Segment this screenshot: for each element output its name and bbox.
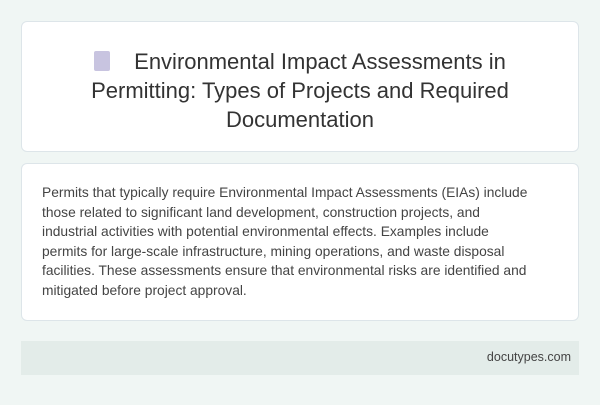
footer: docutypes.com [487, 350, 571, 364]
body text: mitigated before project approval. [42, 282, 247, 298]
body text: industrial activities with potential environmental effects. Examples include [42, 224, 489, 239]
footer [21, 341, 579, 375]
body card [21, 163, 579, 321]
title card [21, 21, 579, 152]
title [91, 49, 509, 132]
body text: those related to significant land development, construction projects, and [42, 204, 480, 220]
body text [42, 185, 527, 298]
title: Documentation [226, 107, 374, 132]
title: Permitting: Types of Projects and Required [91, 78, 509, 103]
title: Environmental Impact Assessments in [134, 49, 506, 74]
body text: facilities. These assessments ensure that environmental risks are identified and [42, 263, 526, 278]
body text: permits for large-scale infrastructure, mining operations, and waste disposal [42, 244, 504, 258]
body text: Permits that typically require Environmental Impact Assessments (EIAs) include [42, 185, 527, 200]
